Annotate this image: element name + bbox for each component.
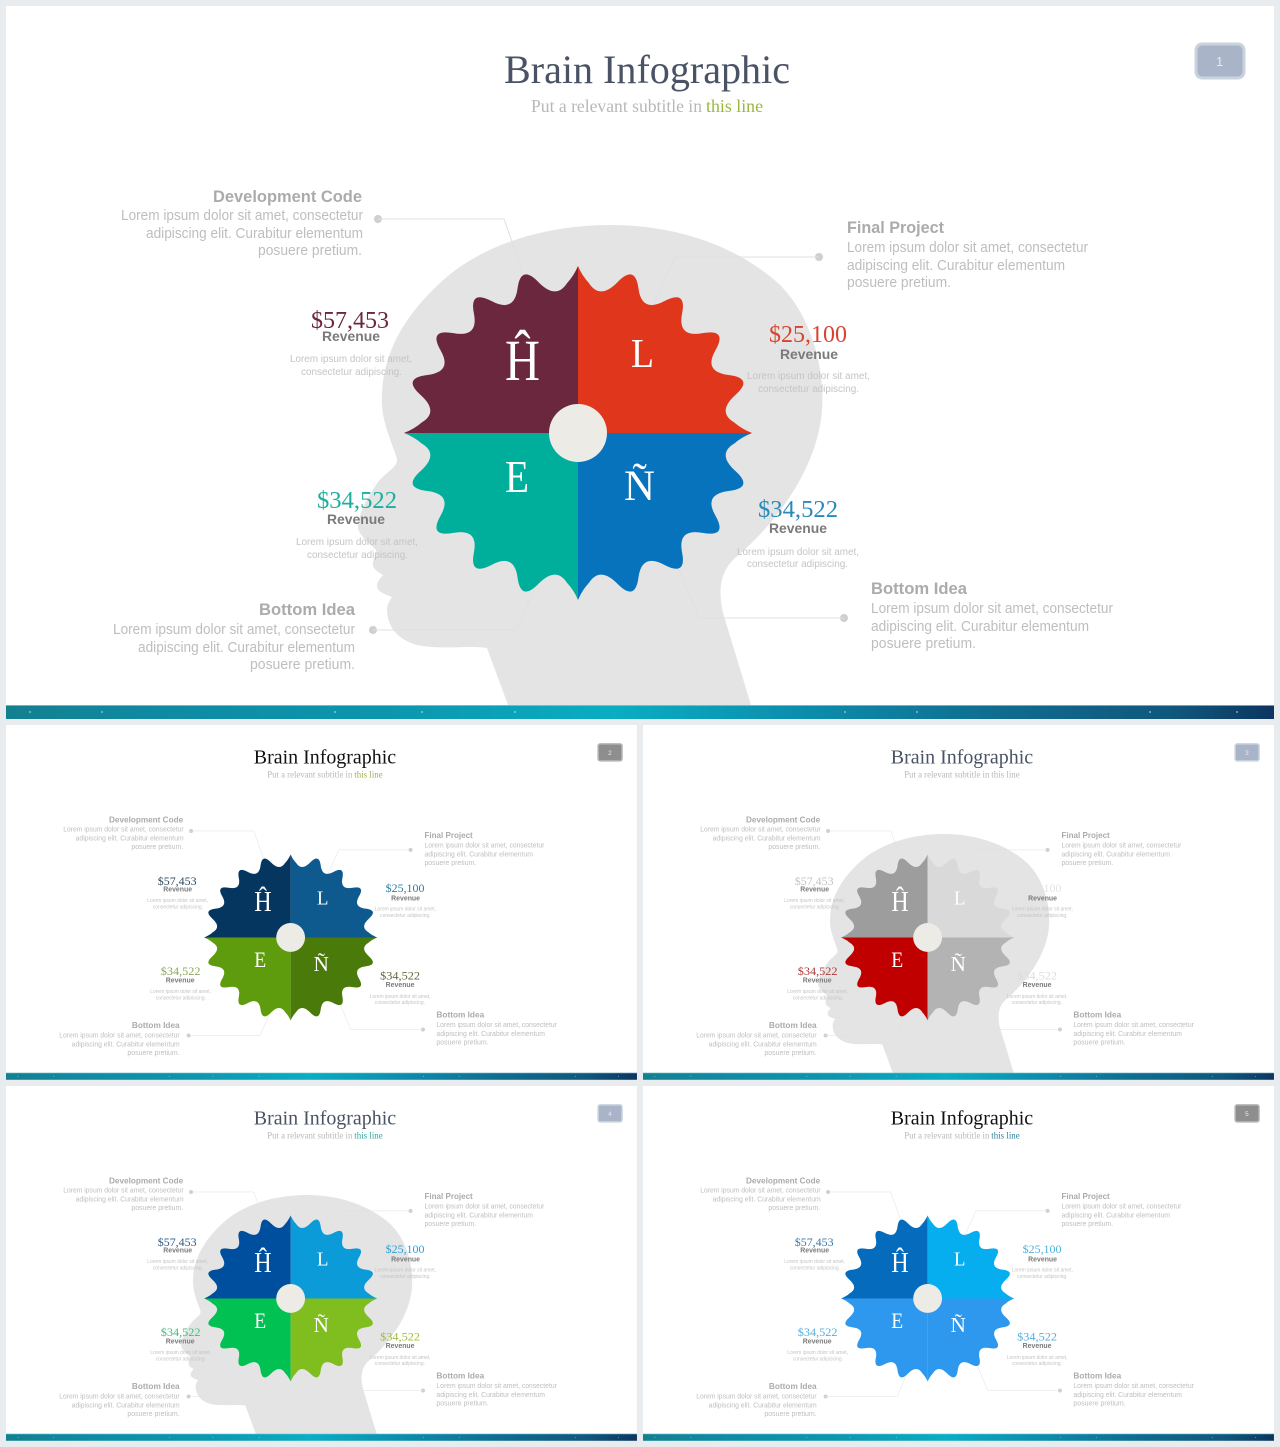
text blocks: adipiscing elit. Curabitur elementum	[713, 833, 821, 842]
text block: bottom idea right	[871, 579, 1113, 652]
gear wheel: L	[317, 1249, 328, 1271]
head silhouette	[358, 225, 822, 705]
revenue: top left: consectetur adipiscing.	[301, 366, 402, 378]
title: Brain Infographic	[891, 746, 1033, 768]
text blocks: posuere pretium.	[131, 842, 183, 851]
revenue figures: $34,522	[380, 968, 420, 982]
revenue figures: $34,522	[161, 964, 201, 978]
gear wheel: Ĥ	[891, 885, 909, 918]
text blocks: Lorem ipsum dolor sit amet, consectetur	[63, 824, 184, 833]
revenue figures: consectetur adipiscing.	[1012, 1000, 1062, 1006]
text blocks: Lorem ipsum dolor sit amet, consectetur	[696, 1391, 817, 1400]
revenue figures: consectetur adipiscing.	[153, 1266, 203, 1272]
gear wheel: L	[631, 330, 654, 376]
revenue figures: consectetur adipiscing.	[1017, 1274, 1067, 1280]
revenue: bottom right: consectetur adipiscing.	[747, 558, 848, 570]
revenue figures: consectetur adipiscing.	[790, 1266, 840, 1272]
connectors	[187, 829, 425, 1037]
text blocks: Final Project	[1061, 830, 1110, 840]
text blocks	[696, 815, 1194, 1057]
revenue: top right	[747, 322, 870, 395]
text block: development code: Development Code	[213, 187, 362, 206]
revenue figures: $34,522	[1017, 968, 1057, 982]
page number badge: 5	[1245, 1111, 1249, 1118]
revenue figures: $57,453	[158, 874, 197, 888]
revenue figures: Revenue	[1028, 1257, 1057, 1264]
text blocks: adipiscing elit. Curabitur elementum	[709, 1400, 817, 1409]
text blocks: Final Project	[1061, 1191, 1110, 1201]
text blocks: posuere pretium.	[436, 1398, 489, 1407]
gear wheel: E	[254, 1308, 266, 1333]
revenue figures	[147, 1235, 436, 1367]
gear wheel: E	[505, 452, 529, 502]
revenue: top right: Revenue	[780, 346, 838, 362]
footer bar	[643, 1434, 1274, 1441]
text blocks	[696, 1176, 1194, 1418]
subtitle: this line	[706, 96, 763, 116]
text block: bottom idea left	[113, 600, 356, 673]
gear wheel: Ĥ	[505, 328, 540, 393]
revenue figures: Lorem ipsum dolor sit amet,	[1007, 994, 1067, 1000]
text blocks: Bottom Idea	[436, 1010, 484, 1020]
gear wheel: E	[891, 1308, 903, 1333]
revenue figures: $25,100	[1023, 881, 1062, 895]
gear wheel	[841, 854, 1014, 1021]
revenue figures: Lorem ipsum dolor sit amet,	[1012, 907, 1073, 913]
gear wheel: Ĥ	[891, 1246, 909, 1279]
text blocks: posuere pretium.	[764, 1048, 817, 1057]
revenue figures	[147, 874, 436, 1006]
revenue figures: consectetur adipiscing.	[156, 996, 206, 1002]
text block: bottom idea right: adipiscing elit. Curabitur elementum	[871, 619, 1089, 635]
page number badge: 4	[608, 1111, 612, 1118]
text blocks: adipiscing elit. Curabitur elementum	[1073, 1390, 1182, 1399]
title: Brain Infographic	[504, 47, 790, 92]
text blocks: Development Code	[746, 815, 820, 825]
revenue: top right: $25,100	[769, 322, 847, 348]
text blocks: adipiscing elit. Curabitur elementum	[72, 1400, 180, 1409]
gear wheel: Ñ	[951, 1313, 966, 1337]
revenue figures: $34,522	[161, 1325, 201, 1339]
page number badge: 1	[1216, 54, 1223, 69]
connector: final project	[652, 253, 823, 308]
revenue figures: Lorem ipsum dolor sit amet,	[370, 1355, 430, 1361]
text blocks	[59, 1176, 557, 1418]
text blocks: Lorem ipsum dolor sit amet, consectetur	[59, 1030, 180, 1039]
revenue: top left: $57,453	[311, 308, 389, 334]
slide 3: grey gear with red quadrant	[643, 725, 1274, 1080]
text block: bottom idea right: Bottom Idea	[871, 579, 968, 598]
connector: bottom idea left	[369, 575, 540, 634]
revenue: bottom right: Lorem ipsum dolor sit amet,	[737, 546, 859, 558]
gear wheel: L	[954, 1249, 965, 1271]
revenue figures: consectetur adipiscing.	[793, 996, 843, 1002]
revenue figures: $57,453	[795, 874, 834, 888]
text block: bottom idea right: posuere pretium.	[871, 636, 976, 652]
text blocks: Lorem ipsum dolor sit amet, consectetur	[1061, 840, 1182, 849]
footer bar	[6, 705, 1274, 719]
subtitle: this line	[354, 1131, 383, 1141]
revenue figures: consectetur adipiscing.	[790, 905, 840, 911]
text blocks: Lorem ipsum dolor sit amet, consectetur	[1061, 1201, 1182, 1210]
revenue figures: Revenue	[800, 887, 829, 894]
text blocks: posuere pretium.	[764, 1409, 817, 1418]
revenue figures: Lorem ipsum dolor sit amet,	[787, 989, 848, 995]
revenue figures: consectetur adipiscing.	[793, 1357, 843, 1363]
revenue figures: consectetur adipiscing.	[153, 905, 203, 911]
revenue figures: Revenue	[386, 982, 415, 989]
revenue figures: $34,522	[1017, 1329, 1057, 1343]
gear wheel: L	[317, 888, 328, 910]
subtitle: Put a relevant subtitle in	[267, 770, 353, 780]
text block: development code	[121, 187, 363, 259]
text block: development code: posuere pretium.	[258, 243, 362, 259]
gear wheel	[841, 1215, 1014, 1382]
text blocks: Lorem ipsum dolor sit amet, consectetur	[436, 1020, 557, 1029]
connectors	[824, 829, 1062, 1037]
text blocks: adipiscing elit. Curabitur elementum	[424, 849, 533, 858]
revenue: bottom left: $34,522	[317, 488, 397, 514]
text block: development code: adipiscing elit. Curabitur elementum	[146, 226, 363, 242]
revenue figures	[784, 1235, 1073, 1367]
text blocks: Final Project	[424, 1191, 473, 1201]
revenue figures: Lorem ipsum dolor sit amet,	[1012, 1268, 1073, 1274]
text blocks: adipiscing elit. Curabitur elementum	[1061, 849, 1170, 858]
revenue figures: Revenue	[803, 978, 832, 985]
revenue figures: Revenue	[391, 1257, 420, 1264]
revenue figures: consectetur adipiscing.	[375, 1361, 425, 1367]
text blocks: posuere pretium.	[768, 1203, 820, 1212]
page number badge	[598, 744, 622, 761]
text blocks: Bottom Idea	[1073, 1371, 1121, 1381]
revenue figures: Lorem ipsum dolor sit amet,	[370, 994, 430, 1000]
text blocks: adipiscing elit. Curabitur elementum	[1061, 1210, 1170, 1219]
text block: final project: posuere pretium.	[847, 275, 951, 291]
text blocks: posuere pretium.	[1073, 1037, 1126, 1046]
text blocks: Development Code	[746, 1176, 820, 1186]
revenue: bottom right: Revenue	[769, 520, 827, 536]
revenue figures: Revenue	[166, 1339, 195, 1346]
revenue: bottom left	[296, 488, 418, 561]
subtitle: Put a relevant subtitle in	[267, 1131, 353, 1141]
revenue: top right: Lorem ipsum dolor sit amet,	[747, 370, 870, 382]
revenue figures: Revenue	[803, 1339, 832, 1346]
revenue figures: Lorem ipsum dolor sit amet,	[375, 907, 436, 913]
text blocks: adipiscing elit. Curabitur elementum	[76, 833, 184, 842]
title: Brain Infographic	[254, 746, 396, 768]
gear wheel: Ñ	[314, 952, 329, 976]
subtitle: this line	[991, 1131, 1020, 1141]
revenue figures: Revenue	[166, 978, 195, 985]
page number badge	[1235, 744, 1259, 761]
revenue: top left: Revenue	[322, 328, 380, 344]
revenue figures: consectetur adipiscing.	[380, 1274, 430, 1280]
revenue figures: $34,522	[798, 964, 838, 978]
text blocks: Development Code	[109, 1176, 183, 1186]
text blocks: Lorem ipsum dolor sit amet, consectetur	[59, 1391, 180, 1400]
revenue figures: Lorem ipsum dolor sit amet,	[150, 989, 211, 995]
page number badge: 2	[608, 750, 612, 757]
revenue: top left	[290, 308, 412, 378]
revenue figures: Lorem ipsum dolor sit amet,	[147, 1259, 208, 1265]
revenue figures: Lorem ipsum dolor sit amet,	[784, 1259, 845, 1265]
text blocks: Bottom Idea	[132, 1381, 180, 1391]
revenue figures: consectetur adipiscing.	[1012, 1361, 1062, 1367]
head silhouette	[181, 1195, 412, 1434]
revenue figures: consectetur adipiscing.	[375, 1000, 425, 1006]
revenue figures: Lorem ipsum dolor sit amet,	[375, 1268, 436, 1274]
text blocks: Lorem ipsum dolor sit amet, consectetur	[700, 824, 821, 833]
gear wheel: Ñ	[951, 952, 966, 976]
text blocks: posuere pretium.	[1061, 1219, 1113, 1228]
text blocks: posuere pretium.	[768, 842, 820, 851]
head silhouette	[818, 834, 1049, 1073]
revenue: bottom right: $34,522	[758, 497, 838, 523]
revenue figures: Lorem ipsum dolor sit amet,	[787, 1350, 848, 1356]
text blocks: posuere pretium.	[127, 1048, 180, 1057]
revenue figures: Revenue	[163, 1248, 192, 1255]
text blocks: Lorem ipsum dolor sit amet, consectetur	[436, 1381, 557, 1390]
text blocks: Bottom Idea	[1073, 1010, 1121, 1020]
revenue figures: Revenue	[163, 887, 192, 894]
text blocks: Lorem ipsum dolor sit amet, consectetur	[1073, 1020, 1194, 1029]
revenue figures: Revenue	[391, 896, 420, 903]
text blocks: adipiscing elit. Curabitur elementum	[709, 1039, 817, 1048]
subtitle: Put a relevant subtitle in	[904, 1131, 990, 1141]
text blocks: Bottom Idea	[769, 1020, 817, 1030]
text blocks: posuere pretium.	[424, 858, 476, 867]
text blocks: adipiscing elit. Curabitur elementum	[436, 1390, 545, 1399]
revenue figures: Lorem ipsum dolor sit amet,	[784, 898, 845, 904]
text blocks: Bottom Idea	[436, 1371, 484, 1381]
revenue: bottom left: Lorem ipsum dolor sit amet,	[296, 536, 418, 548]
subtitle: this line	[991, 770, 1020, 780]
gear wheel: L	[954, 888, 965, 910]
text block: development code: Lorem ipsum dolor sit amet, consectetur	[121, 208, 363, 224]
gear wheel	[204, 1215, 377, 1382]
revenue figures: consectetur adipiscing.	[380, 913, 430, 919]
text block: final project	[847, 218, 1088, 291]
text block: final project: Final Project	[847, 218, 944, 237]
text blocks: adipiscing elit. Curabitur elementum	[76, 1194, 184, 1203]
title: Brain Infographic	[891, 1107, 1033, 1129]
revenue: bottom left: consectetur adipiscing.	[307, 549, 408, 561]
revenue figures: $25,100	[386, 881, 425, 895]
text blocks: posuere pretium.	[436, 1037, 489, 1046]
text block: bottom idea left: adipiscing elit. Curabitur elementum	[138, 640, 355, 656]
slide 1: main brain infographic	[6, 6, 1274, 719]
text blocks: posuere pretium.	[1061, 858, 1113, 867]
gear wheel: Ĥ	[254, 1246, 272, 1279]
gear wheel: Ĥ	[254, 885, 272, 918]
text blocks: Lorem ipsum dolor sit amet, consectetur	[63, 1185, 184, 1194]
revenue figures: consectetur adipiscing.	[156, 1357, 206, 1363]
text blocks: Lorem ipsum dolor sit amet, consectetur	[700, 1185, 821, 1194]
text blocks: Lorem ipsum dolor sit amet, consectetur	[696, 1030, 817, 1039]
text block: bottom idea right: Lorem ipsum dolor sit amet, consectetur	[871, 601, 1113, 617]
text blocks: Lorem ipsum dolor sit amet, consectetur	[424, 1201, 545, 1210]
slide 2: dark blue and green gear	[6, 725, 637, 1080]
text block: final project: adipiscing elit. Curabitur elementum	[847, 258, 1065, 274]
page number badge	[1235, 1105, 1259, 1122]
revenue figures	[784, 874, 1073, 1006]
gear wheel	[404, 266, 752, 600]
connector: development code	[374, 215, 523, 273]
text blocks: Development Code	[109, 815, 183, 825]
slide 5: all blue gear	[643, 1086, 1274, 1441]
footer bar	[6, 1434, 637, 1441]
text block: bottom idea left: Bottom Idea	[259, 600, 356, 619]
connector: bottom idea right	[676, 563, 848, 622]
revenue figures: $34,522	[380, 1329, 420, 1343]
revenue figures: $25,100	[386, 1242, 425, 1256]
revenue figures: Lorem ipsum dolor sit amet,	[1007, 1355, 1067, 1361]
connectors	[824, 1190, 1062, 1398]
revenue figures: Revenue	[1023, 1343, 1052, 1350]
subtitle: Put a relevant subtitle in	[531, 96, 702, 116]
revenue figures: Revenue	[1023, 982, 1052, 989]
gear wheel	[204, 854, 377, 1021]
subtitle: Put a relevant subtitle in	[904, 770, 990, 780]
text block: bottom idea left: posuere pretium.	[250, 657, 355, 673]
footer bar	[6, 1073, 637, 1080]
revenue figures: Revenue	[386, 1343, 415, 1350]
text blocks	[59, 815, 557, 1057]
text blocks: Lorem ipsum dolor sit amet, consectetur	[424, 840, 545, 849]
text blocks: posuere pretium.	[127, 1409, 180, 1418]
text blocks: adipiscing elit. Curabitur elementum	[1073, 1029, 1182, 1038]
revenue figures: $25,100	[1023, 1242, 1062, 1256]
gear wheel: Ñ	[624, 463, 655, 510]
text blocks: posuere pretium.	[131, 1203, 183, 1212]
title: Brain Infographic	[254, 1107, 396, 1129]
text blocks: posuere pretium.	[424, 1219, 476, 1228]
gear wheel: E	[891, 947, 903, 972]
text blocks: Final Project	[424, 830, 473, 840]
page number badge	[598, 1105, 622, 1122]
revenue figures: $57,453	[158, 1235, 197, 1249]
revenue figures: Revenue	[800, 1248, 829, 1255]
subtitle: this line	[354, 770, 383, 780]
revenue figures: Revenue	[1028, 896, 1057, 903]
revenue figures: Lorem ipsum dolor sit amet,	[150, 1350, 211, 1356]
text blocks: posuere pretium.	[1073, 1398, 1126, 1407]
text blocks: adipiscing elit. Curabitur elementum	[424, 1210, 533, 1219]
text blocks: adipiscing elit. Curabitur elementum	[713, 1194, 821, 1203]
revenue: bottom left: Revenue	[327, 511, 385, 527]
revenue figures: $57,453	[795, 1235, 834, 1249]
footer bar	[643, 1073, 1274, 1080]
revenue figures: $34,522	[798, 1325, 838, 1339]
page number badge: 3	[1245, 750, 1249, 757]
text blocks: adipiscing elit. Curabitur elementum	[436, 1029, 545, 1038]
revenue figures: consectetur adipiscing.	[1017, 913, 1067, 919]
text block: bottom idea left: Lorem ipsum dolor sit amet, consectetur	[113, 622, 355, 638]
revenue: bottom right	[737, 497, 859, 570]
gear wheel: Ñ	[314, 1313, 329, 1337]
page number badge	[1196, 44, 1244, 78]
slide 4: blue and green gear with head	[6, 1086, 637, 1441]
text blocks: Bottom Idea	[132, 1020, 180, 1030]
revenue figures: Lorem ipsum dolor sit amet,	[147, 898, 208, 904]
text blocks: adipiscing elit. Curabitur elementum	[72, 1039, 180, 1048]
gear wheel: E	[254, 947, 266, 972]
text blocks: Lorem ipsum dolor sit amet, consectetur	[1073, 1381, 1194, 1390]
connectors	[187, 1190, 425, 1398]
text block: final project: Lorem ipsum dolor sit amet, consectetur	[847, 240, 1088, 256]
text blocks: Bottom Idea	[769, 1381, 817, 1391]
revenue: top left: Lorem ipsum dolor sit amet,	[290, 353, 412, 365]
revenue: top right: consectetur adipiscing.	[758, 383, 859, 395]
